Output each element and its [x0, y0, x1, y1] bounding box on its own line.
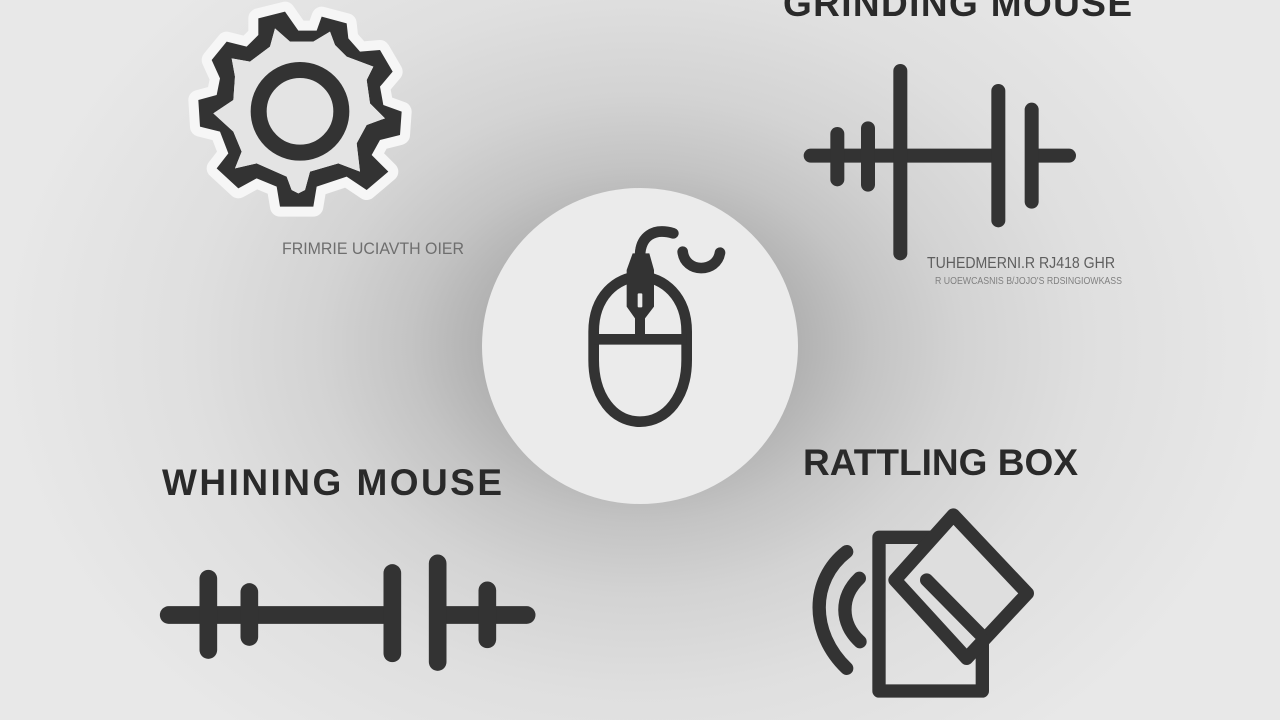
gear caption: FRIMRIE UCIAVTH OIER	[282, 239, 464, 258]
panel: gear	[198, 12, 464, 258]
central circle with mouse	[482, 188, 798, 504]
icon: rattling box	[819, 515, 1027, 691]
icon: gear	[198, 12, 402, 207]
grinding caption: TUHEDMERNI.R RJ418 GHR	[927, 255, 1115, 272]
panel: grinding mouse	[783, 0, 1132, 287]
icon: grinding waveform	[811, 71, 1069, 253]
central circle	[482, 188, 798, 504]
grinding sub-caption: R UOEWCASNIS B/JOJO'S RDSINGIOWKASS	[935, 276, 1122, 287]
icon: whining waveform	[169, 563, 527, 662]
panel: rattling box	[803, 442, 1078, 691]
heading: whining mouse: WHINING MOUSE	[162, 462, 502, 503]
heading: rattling box: RATTLING BOX	[803, 442, 1078, 483]
icon: mouse	[594, 232, 720, 422]
